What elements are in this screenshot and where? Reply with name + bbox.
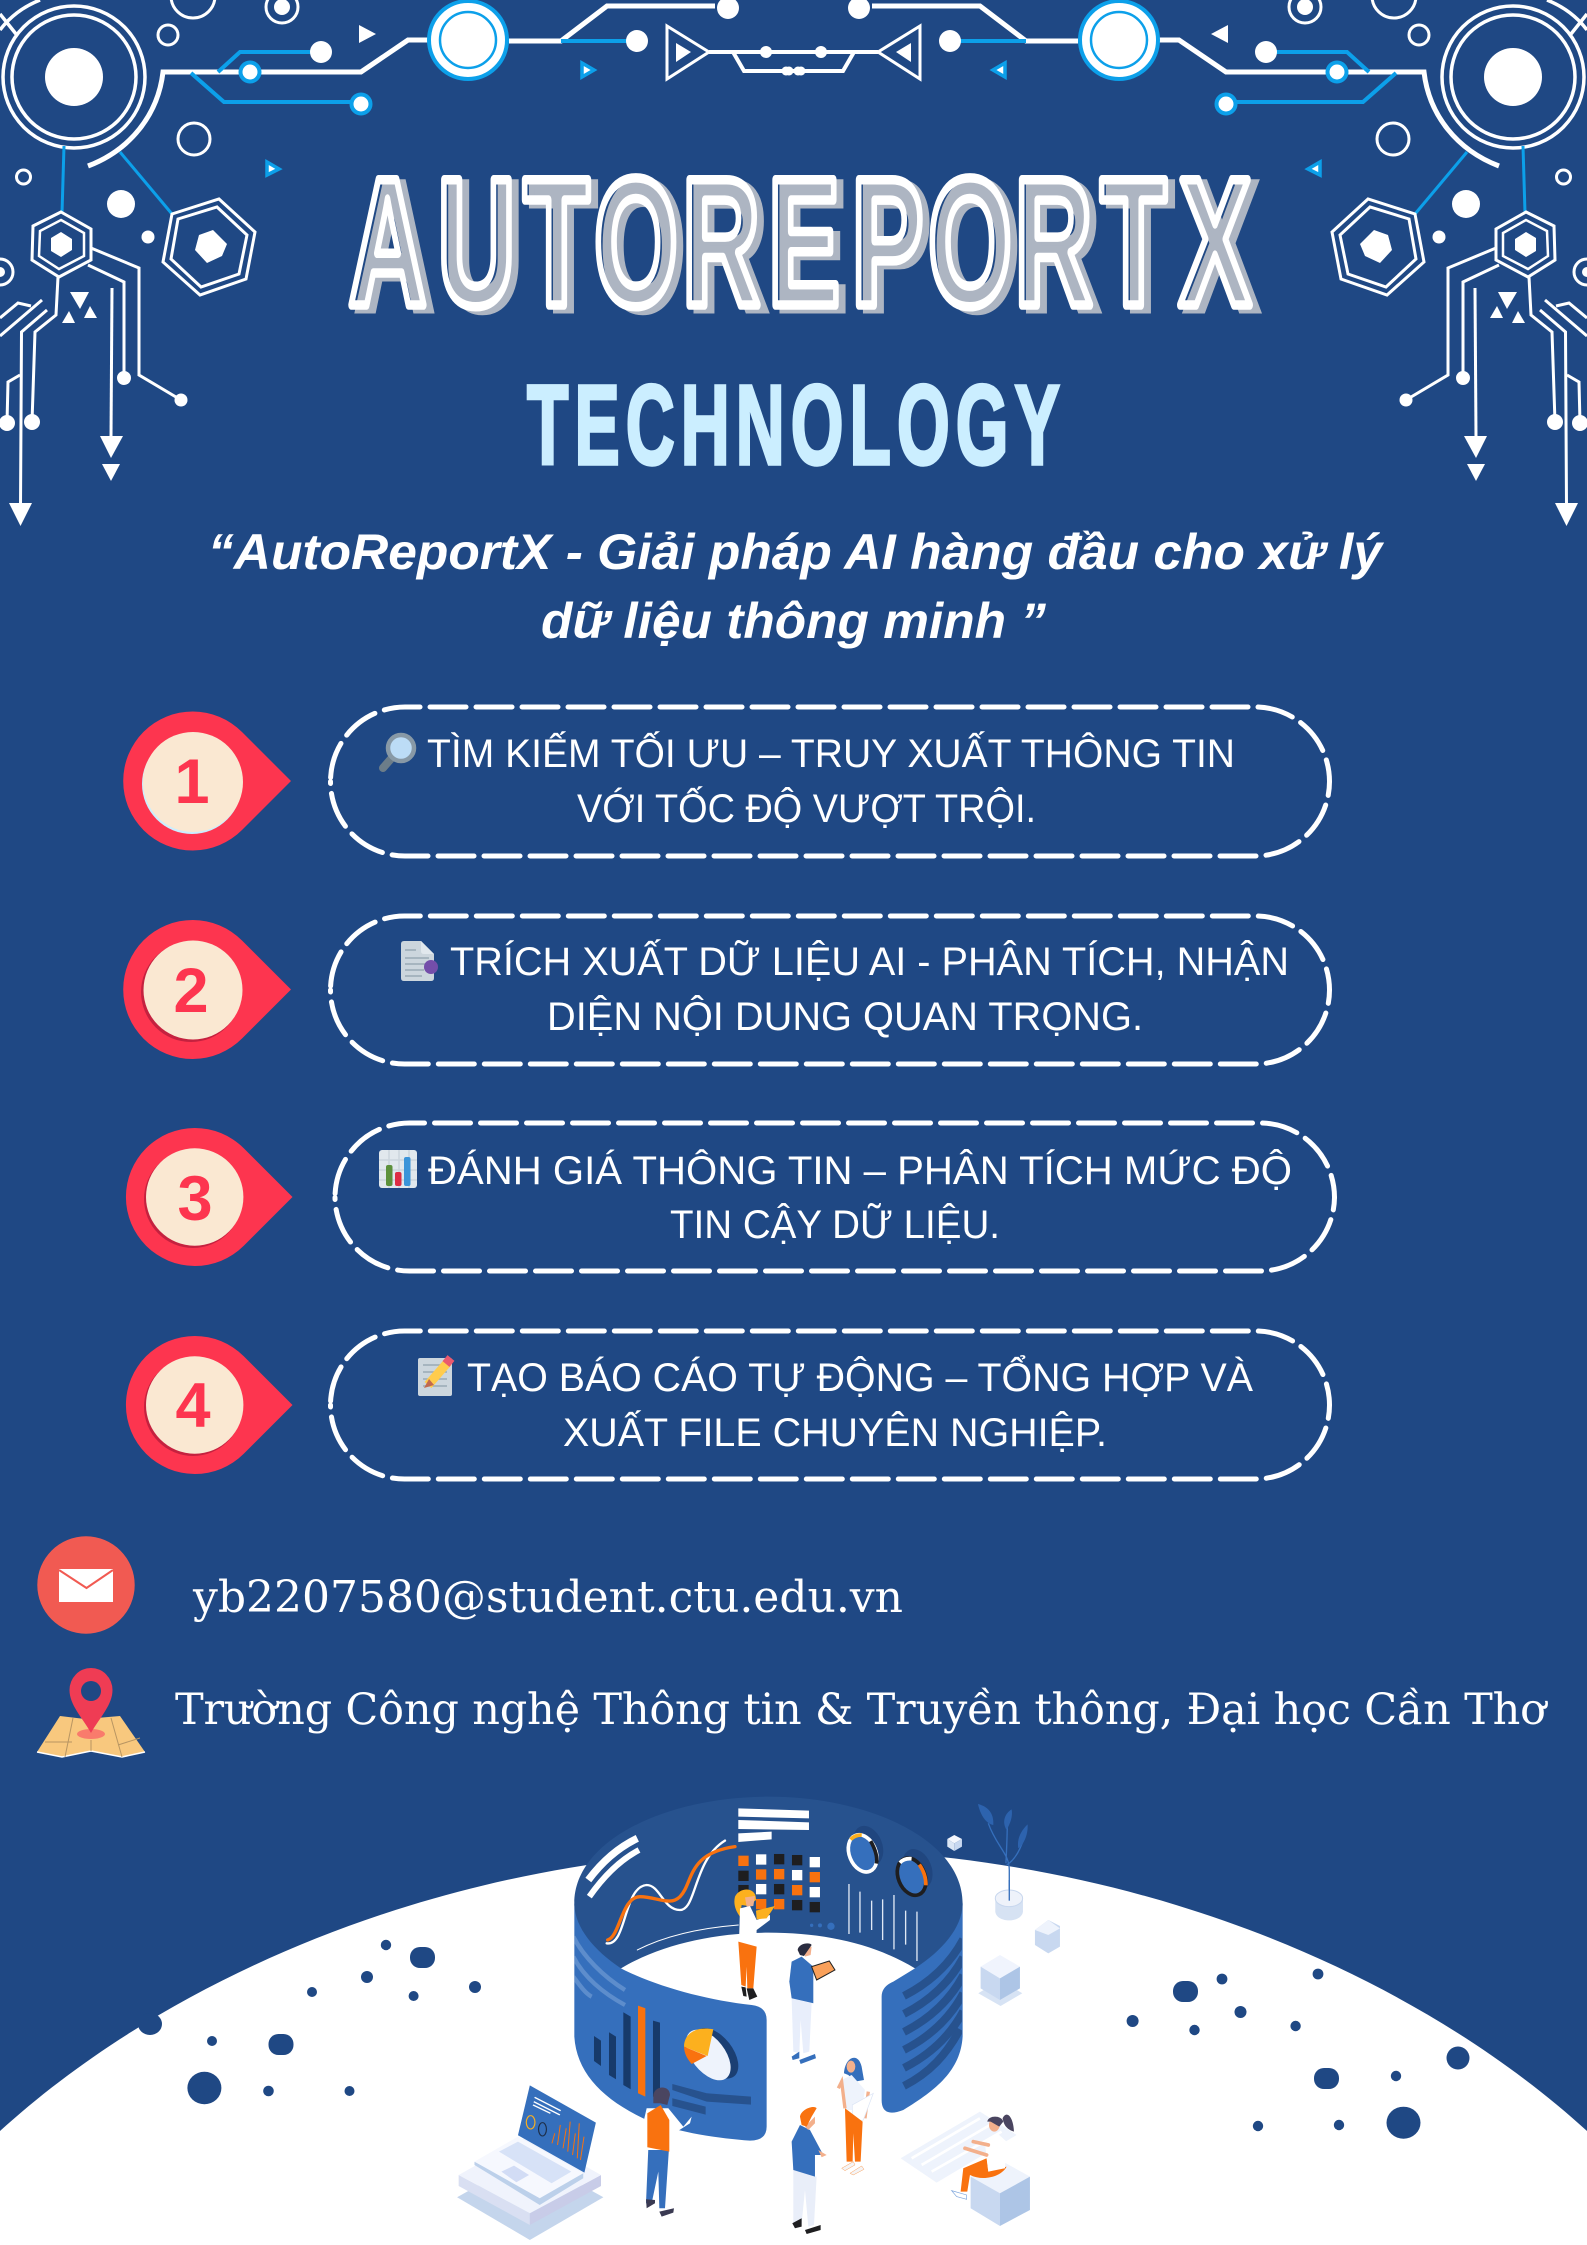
right band stripes bbox=[904, 1939, 963, 2086]
email text: yb2207580@student.ctu.edu.vn bbox=[192, 1572, 903, 1623]
hollow rings bbox=[0, 0, 298, 285]
text 3: TIN CẬY DỮ LIỆU. bbox=[670, 1202, 1000, 1247]
dome dots bbox=[138, 1940, 1470, 2139]
number pin 2: 2 bbox=[173, 956, 209, 1026]
arrow heads bbox=[9, 436, 123, 526]
text 2 bbox=[450, 938, 1289, 1039]
circuit decoration: left side bbox=[0, 0, 802, 526]
donut 2 bbox=[890, 1844, 940, 1900]
person: woman with blue hair bbox=[838, 2058, 873, 2175]
blue triangles bbox=[267, 63, 594, 175]
small hexagon bbox=[32, 212, 91, 277]
tagline: dữ liệu thông minh ” bbox=[541, 593, 1046, 649]
ringed dots bbox=[240, 62, 370, 114]
text 1: VỚI TỐC ĐỘ VƯỢT TRỘI. bbox=[577, 785, 1036, 831]
text 1 bbox=[427, 730, 1235, 831]
pager dots bbox=[810, 1923, 835, 1930]
item 1 bbox=[123, 707, 1329, 856]
dashboard illustration bbox=[573, 1797, 1060, 2234]
number pin 1: 1 bbox=[174, 747, 210, 817]
dashed box 2 bbox=[330, 916, 1330, 1064]
node dots bbox=[107, 0, 802, 244]
person: man with orange hair bbox=[792, 2107, 827, 2234]
text 2: DIỆN NỘI DUNG QUAN TRỌNG. bbox=[547, 994, 1143, 1039]
text 4: XUẤT FILE CHUYÊN NGHIỆP. bbox=[563, 1409, 1107, 1455]
number pin 2 bbox=[123, 920, 291, 1059]
title: AUTOREPORTX bbox=[355, 144, 1258, 348]
band text bars bbox=[672, 2084, 751, 2115]
person: seated woman at keyboard bbox=[901, 2112, 1030, 2226]
left band stripes bbox=[573, 1937, 625, 2005]
lower wires bbox=[0, 248, 181, 506]
address text: Trường Công nghệ Thông tin & Truyền thông, Đại học Cần Thơ bbox=[175, 1685, 1548, 1735]
subtitle: TECHNOLOGY bbox=[527, 362, 1060, 488]
number pin 1 bbox=[123, 712, 291, 850]
medium cube bbox=[978, 1955, 1022, 2006]
small cube bbox=[947, 1835, 962, 1851]
icon: bar chart bbox=[379, 1150, 417, 1188]
dashboard left band bbox=[574, 1903, 767, 2141]
centre connector bbox=[766, 52, 821, 71]
dashed box 1 bbox=[330, 707, 1330, 856]
number pin 4 bbox=[126, 1336, 293, 1474]
dashed box 3 bbox=[335, 1123, 1334, 1271]
item 2 bbox=[123, 916, 1330, 1064]
icon: memo bbox=[418, 1358, 452, 1396]
person: blonde woman bbox=[734, 1890, 775, 2000]
strips bbox=[588, 1838, 639, 1897]
square grid bbox=[738, 1854, 820, 1912]
title: AUTOREPORTX bbox=[348, 140, 1251, 344]
icon: map pin bbox=[37, 1668, 145, 1757]
dashed box 4 bbox=[330, 1331, 1330, 1479]
person: man pointing bbox=[642, 2087, 692, 2217]
plant bbox=[978, 1804, 1028, 1920]
vertical lines chart bbox=[849, 1884, 917, 1961]
white wires bbox=[88, 6, 800, 166]
icon: mail bbox=[37, 1536, 135, 1634]
number pin 3 bbox=[126, 1128, 293, 1266]
text 4: TẠO BÁO CÁO TỰ ĐỘNG – TỔNG HỢP VÀ bbox=[467, 1353, 1253, 1400]
outline triangle bbox=[667, 26, 709, 79]
donut 1 bbox=[841, 1821, 890, 1876]
icon: magnifier bbox=[383, 735, 414, 768]
pie chart bbox=[677, 2020, 747, 2088]
text 1: TÌM KIẾM TỐI ƯU – TRUY XUẤT THÔNG TIN bbox=[427, 730, 1235, 776]
text 2: TRÍCH XUẤT DỮ LIỆU AI - PHÂN TÍCH, NHẬN bbox=[450, 938, 1289, 984]
text 4 bbox=[467, 1353, 1253, 1455]
big target circle bbox=[0, 0, 145, 148]
text 3: ĐÁNH GIÁ THÔNG TIN – PHÂN TÍCH MỨC ĐỘ bbox=[428, 1148, 1292, 1193]
laptop illustration bbox=[457, 2085, 603, 2240]
item 4 bbox=[126, 1331, 1330, 1479]
blue wires bbox=[62, 41, 628, 214]
person: man with tablet bbox=[789, 1943, 835, 2064]
circuit decoration: right side bbox=[784, 0, 1587, 526]
dashboard right band bbox=[882, 1903, 963, 2113]
white dome bbox=[0, 1849, 1587, 2245]
dashboard top face bbox=[574, 1797, 963, 1968]
icon: document bbox=[401, 941, 438, 981]
tagline bbox=[208, 524, 1384, 649]
bar chart on band bbox=[594, 2006, 660, 2097]
tagline: “AutoReportX - Giải pháp AI hàng đầu cho xử lý bbox=[208, 524, 1384, 580]
header bars bbox=[738, 1808, 809, 1842]
triangles bbox=[62, 25, 691, 323]
item 3 bbox=[126, 1123, 1335, 1271]
big node bbox=[429, 1, 507, 79]
wave chart bbox=[607, 1841, 738, 1950]
far cube bbox=[1035, 1920, 1060, 1953]
large hexagon bbox=[163, 199, 255, 295]
number pin 4: 4 bbox=[175, 1371, 211, 1441]
wire end dots bbox=[0, 371, 188, 431]
number pin 3: 3 bbox=[177, 1164, 213, 1234]
text 3 bbox=[428, 1148, 1292, 1247]
